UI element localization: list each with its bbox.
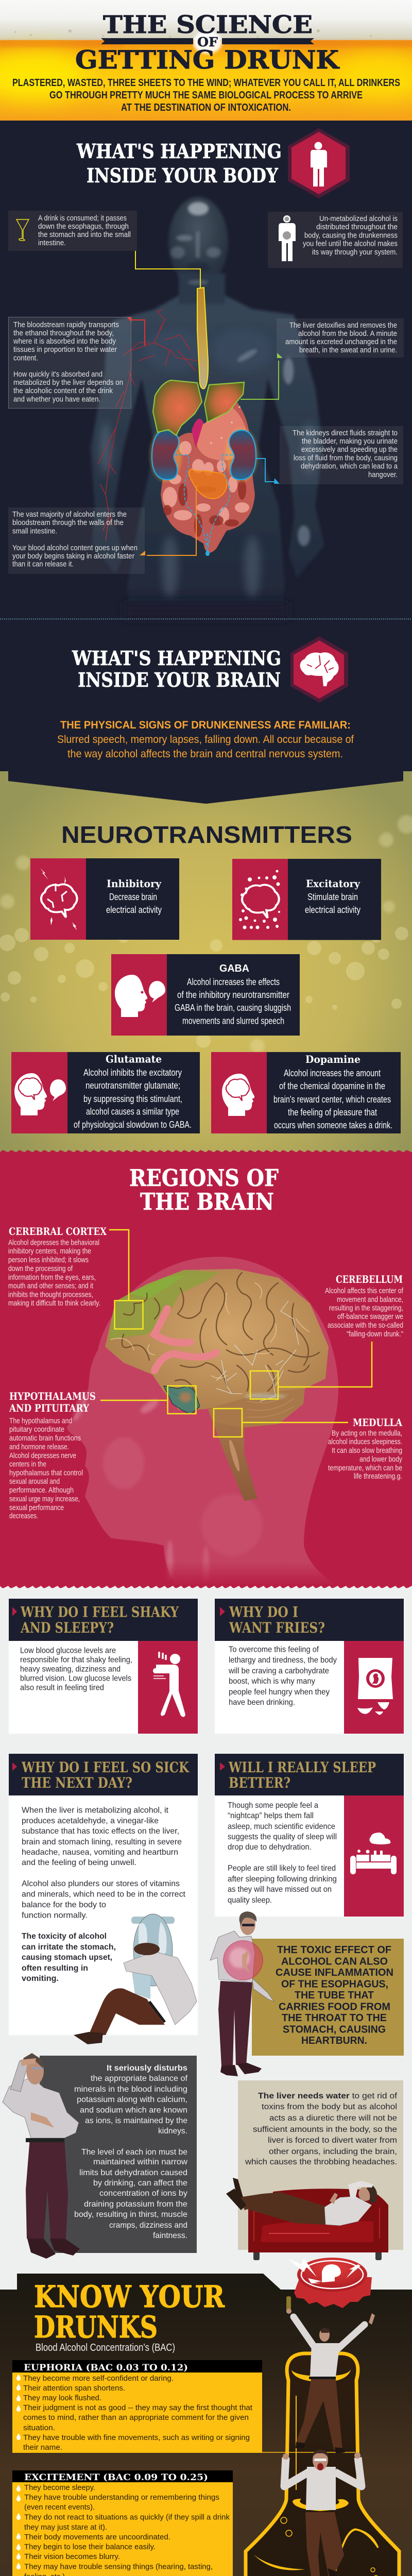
callout arrow: intestine orange [140, 486, 196, 555]
callout: small intestine: The vast majority of alcohol enters the [12, 511, 127, 519]
panel: euphoria: They have trouble with fine movements, such as writing or signing [23, 2433, 250, 2442]
panel: esophagus toxic effect: CAUSE INFLAMMATION [276, 1967, 393, 1978]
callout: cerebral cortex: CEREBRAL CORTEX [9, 1226, 107, 1238]
panel: liver needs water: other organs, including the brain, [269, 2147, 397, 2156]
callout: drink consumed [8, 211, 137, 251]
icon: body with stomach [279, 215, 296, 261]
card: glutamate: by suppressing this stimulant, [83, 1093, 182, 1104]
background: know your drunks section [0, 2274, 412, 2576]
card: want fries: To overcome this feeling of [229, 1646, 319, 1654]
panel: excitement: They become sleepy. [24, 2483, 95, 2492]
illustration: brain [105, 1269, 329, 1501]
card: sick the next day: balance for the body to [22, 1901, 106, 1909]
heading: know your drunks [34, 2279, 225, 2353]
icon: staggering figure [153, 1652, 185, 1717]
illustration: ureters and droplet [175, 455, 233, 549]
callout: hypothalamus and pituitary: The hypothalamus and [9, 1417, 72, 1425]
callout: hypothalamus and pituitary: performance. Although [9, 1486, 74, 1495]
callout: hypothalamus and pituitary: pituitary coordinate [9, 1426, 64, 1434]
illustration: man vomiting into toilet [74, 1914, 197, 2044]
card: dopamine [211, 1052, 401, 1133]
heading: inside your brain: INSIDE YOUR BRAIN [78, 668, 281, 691]
panel: liver needs water: sufficient amounts in the body, so the [253, 2125, 397, 2134]
card: shaky and sleepy: WHY DO I FEEL SHAKY [20, 1603, 179, 1621]
panel: euphoria [12, 2360, 262, 2453]
illustration: kidneys [150, 428, 258, 482]
panel: euphoria: comes to mind, rather than an appropriate comment for the given [23, 2413, 249, 2422]
card: excitatory [232, 859, 381, 940]
panel: disturbs mineral balance: kidneys. [158, 2127, 187, 2136]
illustration: man with headache [3, 2053, 80, 2259]
card: want fries: lethargy and tiredness, the body [229, 1656, 337, 1665]
card: will I really sleep better: Though some people feel a [228, 1801, 318, 1810]
card: shaky and sleepy [9, 1599, 198, 1734]
card: want fries: have been drinking. [229, 1698, 295, 1707]
illustration: esophagus [197, 287, 208, 389]
callout: un-metabolized alcohol: distributed throughout the [316, 223, 398, 231]
callout: kidneys [280, 426, 403, 484]
panel: disturbs mineral balance: faintness. [153, 2231, 187, 2240]
icon: bed with cloud [350, 1833, 397, 1874]
card: sick the next day: often resulting in [22, 1964, 88, 1973]
card: will I really sleep better: asleep, much scientific evidence [228, 1822, 335, 1831]
card: sick the next day: substance that has toxic effects on the liver, [22, 1827, 179, 1836]
callout: cerebral cortex: information from the eyes, ears, [8, 1274, 96, 1282]
card: sick the next day: produces acetaldehyde, a vinegar-like [22, 1817, 159, 1825]
background: light lower section [0, 1586, 412, 2292]
intro text [12, 77, 400, 113]
panel: disturbs mineral balance: cramps, dizziness and [109, 2221, 187, 2230]
card: will I really sleep better: “nightcap” helps them fall [228, 1811, 314, 1820]
card: dopamine: Alcohol increases the amount [284, 1067, 381, 1078]
card: sick the next day: can irritate the stomach, [22, 1943, 116, 1952]
callout: bloodstream [8, 317, 131, 408]
callout: medulla: MEDULLA [353, 1417, 403, 1429]
card: will I really sleep better: suggests the quality of sleep will [228, 1833, 337, 1841]
callout: bloodstream: and whether you have eaten. [13, 396, 100, 404]
callout: un-metabolized alcohol: its way through your system. [312, 248, 398, 257]
panel: excitement: They may have trouble sensing things (hearing, tasting, [24, 2563, 213, 2571]
background: neurotransmitters olive bokeh [0, 771, 412, 1153]
icon: head with brain [222, 1074, 254, 1116]
panel: excitement: they may just stare at it). [24, 2523, 107, 2532]
callout arrow: drink yellow [131, 245, 200, 289]
callout: hypothalamus and pituitary: sexual arousal and [9, 1478, 60, 1486]
callout: hypothalamus and pituitary: decreases. [9, 1512, 38, 1520]
panel: disturbs mineral balance [40, 2056, 197, 2253]
callout: hypothalamus and pituitary: centers in the [9, 1461, 46, 1469]
panel: euphoria: Their judgment is not as good -- they may say the first thought that [23, 2403, 253, 2412]
card: GABA: of the inhibitory neurotransmitter [177, 989, 289, 1000]
panel: liver needs water: toxins from the body but as alcohol [262, 2103, 397, 2111]
card: sick the next day [9, 1754, 198, 2035]
illustration: human body silhouette [91, 197, 324, 619]
callout: cerebral cortex: Alcohol depresses the behavioral [8, 1239, 99, 1247]
callout: cerebral cortex: person less inhibited; it slows [8, 1256, 89, 1264]
panel: disturbs mineral balance: minerals in the blood including [74, 2085, 187, 2094]
callout: kidneys: The kidneys direct fluids straight to [293, 429, 398, 437]
card: sick the next day: The toxicity of alcohol [22, 1932, 107, 1941]
panel: esophagus toxic effect: ALCOHOL CAN ALSO [281, 1956, 388, 1967]
title: OF [197, 35, 218, 49]
card: want fries [215, 1599, 404, 1734]
panel: disturbs mineral balance: draining potassium from the [84, 2200, 187, 2209]
card: inhibitory: Decrease brain [109, 891, 157, 902]
card: will I really sleep better: after sleeping following drinking [228, 1875, 337, 1884]
panel: disturbs mineral balance: It seriously disturbs [107, 2064, 187, 2073]
icon: martini glass [16, 219, 29, 241]
illustration: man with heartburn [210, 1911, 274, 2076]
panel: disturbs mineral balance: maintained within narrow [93, 2158, 187, 2166]
illustration: liver [153, 380, 244, 435]
callout: medulla [214, 1409, 403, 1481]
panel: euphoria: EUPHORIA (BAC 0.03 TO 0.12) [24, 2363, 188, 2372]
background: dark body section [0, 121, 412, 771]
callout: liver: The liver detoxifies and removes the [289, 321, 397, 330]
callout: drink consumed: the stomach and into the small [38, 231, 131, 239]
panel: liver needs water: acts as a diuretic there will not be [269, 2114, 397, 2123]
panel: excitement: EXCITEMENT (BAC 0.09 TO 0.25) [24, 2472, 208, 2482]
callout: hypothalamus and pituitary: sexual urge may increase, [9, 1495, 80, 1503]
card: shaky and sleepy: AND SLEEPY? [20, 1619, 114, 1636]
illustration: small intestine outlined [189, 469, 227, 499]
text: physical signs [57, 719, 354, 760]
card: excitatory: Stimulate brain [307, 891, 358, 902]
card: glutamate: Alcohol inhibits the excitatory [83, 1067, 182, 1078]
callout: drink consumed: A drink is consumed; it passes [38, 214, 127, 223]
illustration: translucent head profile [67, 1257, 338, 1584]
heading: know your drunks: KNOW YOUR [34, 2279, 225, 2314]
callout: small intestine: small intestine. [12, 528, 57, 536]
callout: hypothalamus and pituitary: sexual performance [9, 1504, 64, 1512]
panel: euphoria: They may look flushed. [23, 2394, 101, 2402]
panel: disturbs mineral balance: the appropriate balance of [91, 2074, 188, 2083]
heading: know your drunks: DRUNKS [34, 2310, 158, 2345]
card: GABA [111, 954, 300, 1036]
panel: esophagus toxic effect: THE TUBE THAT [295, 1990, 374, 2001]
heading: inside your body: INSIDE YOUR BODY [87, 164, 279, 187]
callout: drink consumed: down the esophagus, through [38, 223, 129, 231]
callout: bloodstream: content. [13, 354, 38, 363]
card: sick the next day: and minerals, which need to be in the correct [22, 1890, 186, 1899]
icon: brain in hexagon [290, 636, 348, 703]
brain temporal pink folds [154, 1309, 216, 1370]
panel: disturbs mineral balance: and sodium which are known [80, 2106, 187, 2114]
callout: bloodstream: The bloodstream rapidly transports [13, 321, 119, 329]
illustration: man on red couch [226, 2178, 388, 2260]
panel shape: dark chevron [8, 768, 403, 804]
card: sick the next day: and the feeling of being unwell. [22, 1858, 136, 1867]
card: want fries: people feel hungry when they [229, 1688, 330, 1697]
panel: excitement [12, 2470, 233, 2576]
callout: liver [277, 318, 404, 358]
callout: small intestine: than it can release it. [12, 561, 74, 569]
panel: disturbs mineral balance: potassium along with calcium, [77, 2095, 187, 2104]
card: excitatory: electrical activity [305, 904, 361, 915]
callout: hypothalamus and pituitary: automatic brain functions [9, 1434, 81, 1443]
icon: person in hexagon [288, 128, 350, 198]
callout: cerebral cortex: down the processing of [8, 1265, 73, 1273]
heading: neurotransmitters: NEUROTRANSMITTERS [61, 821, 352, 848]
heading: inside your brain: WHAT'S HAPPENING [72, 647, 281, 670]
card: shaky and sleepy: also result in feeling tired [20, 1684, 104, 1692]
panel: esophagus toxic effect: CARRIES FOOD FROM [279, 2001, 390, 2012]
icon: chip bag [357, 1658, 393, 1715]
card: will I really sleep better [215, 1754, 404, 1917]
callout: hypothalamus and pituitary: and hormone release. [9, 1443, 69, 1451]
heading: inside your brain [72, 647, 281, 691]
callout: small intestine [8, 507, 145, 574]
brain folds [122, 1273, 319, 1397]
callout: un-metabolized alcohol: body, causing the drunkenness [304, 232, 398, 240]
text: physical signs: THE PHYSICAL SIGNS OF DRUNKENNESS ARE FAMILIAR: [60, 719, 351, 731]
panel: euphoria: They become more self-confident or daring. [23, 2374, 174, 2383]
callout: small intestine: bloodstream through the walls of the [12, 519, 124, 527]
panel: esophagus toxic effect [252, 1939, 404, 2056]
callout: cerebral cortex [8, 1226, 143, 1329]
intro text: AT THE DESTINATION OF INTOXICATION. [121, 102, 291, 113]
callout: cerebral cortex: making it difficult to think clearly. [8, 1299, 100, 1308]
heading: regions of the brain: THE BRAIN [140, 1188, 274, 1215]
panel: esophagus toxic effect: THE TOXIC EFFECT OF [277, 1944, 391, 1956]
card: dopamine: of the chemical dopamine in the [279, 1080, 385, 1091]
callout: un-metabolized alcohol: you feel until the alcohol makes [303, 240, 398, 248]
panel: disturbs mineral balance: as ions, is maintained by the [85, 2116, 187, 2125]
card: will I really sleep better: BETTER? [229, 1774, 290, 1791]
card: GABA: GABA in the brain, causing sluggish [175, 1002, 291, 1013]
background: crimson brain regions [0, 1150, 412, 1587]
illustration: euphoric man [286, 2296, 375, 2453]
callout: small intestine: your body begins taking in alcohol faster [12, 552, 134, 561]
callout: kidneys: excessively and speeding up the [301, 446, 398, 454]
panel: liver needs water [238, 2080, 403, 2250]
panel: excitement: Their body movements are uncoordinated. [24, 2533, 170, 2541]
panel: disturbs mineral balance: The level of each ion must be [81, 2148, 187, 2157]
panel: disturbs mineral balance: concentration of ions by [99, 2189, 187, 2198]
callout: hypothalamus and pituitary: HYPOTHALAMUS [9, 1391, 96, 1402]
brain frontal lobe green area [108, 1270, 219, 1340]
card: sick the next day: headache, nausea, vomiting and heartburn [22, 1848, 178, 1857]
callout: cerebral cortex: inhibitory centers, making the [8, 1247, 91, 1256]
callout: hypothalamus and pituitary: AND PITUITARY [9, 1402, 90, 1414]
card: want fries: will be craving a carbohydrate [228, 1667, 329, 1675]
callout: bloodstream: the ethanol throughout the body, [13, 329, 114, 337]
card: want fries: WANT FRIES? [229, 1619, 325, 1636]
panel: esophagus toxic effect: THE THROAT TO THE [282, 2012, 387, 2024]
card: sick the next day: causing stomach upset, [22, 1953, 112, 1962]
callout: cerebellum [250, 1274, 404, 1399]
callout: hypothalamus and pituitary [9, 1386, 196, 1520]
card: inhibitory [30, 858, 179, 940]
panel: liver needs water: The liver needs water to get rid of [258, 2092, 398, 2100]
card: sick the next day: THE NEXT DAY? [22, 1774, 132, 1791]
illustration: excited man [283, 2450, 362, 2576]
card: dopamine: Dopamine [305, 1053, 360, 1065]
card: shaky and sleepy: blurred vision. Low glucose levels [20, 1674, 131, 1683]
card: excitatory: Excitatory [306, 877, 360, 890]
card: inhibitory: electrical activity [106, 904, 162, 915]
title: THE SCIENCE [103, 11, 313, 39]
callout: bloodstream: metabolized by the liver depends on [13, 379, 123, 387]
callout: bloodstream: the alcoholic content of the drink [13, 387, 113, 395]
callout arrow: kidney blue [256, 459, 280, 484]
card: shaky and sleepy: responsible for that shaky feeling, [20, 1656, 132, 1664]
callout: kidneys: the bladder, making you urinate [302, 437, 398, 446]
card: glutamate: Glutamate [106, 1053, 162, 1065]
callout: liver: breath, in the sweat and in urine. [299, 346, 397, 354]
illustration: blood vessels [98, 309, 198, 541]
heading: know your drunks: Blood Alcohol Concentration's (BAC) [36, 2342, 175, 2353]
callout: un-metabolized alcohol: Un-metabolized alcohol is [319, 215, 398, 223]
panel: euphoria: their name. [23, 2443, 62, 2452]
callout arrow: bloodstream red [127, 317, 145, 346]
card: will I really sleep better: quality sleep. [228, 1896, 272, 1905]
brain hypothalamus highlight [164, 1386, 200, 1414]
callout: liver: amount is excreted unchanged in the [285, 338, 397, 346]
callout: bloodstream: How quickly it's absorbed and [13, 370, 102, 379]
callout: liver: alcohol from the blood. A minute [298, 330, 397, 338]
card: GABA: GABA [219, 963, 249, 974]
panel: excitement: They do not react to situations as quickly (if they spill a drink [24, 2513, 230, 2521]
card: want fries: WHY DO I [229, 1603, 298, 1621]
card: glutamate: neurotransmitter glutamate; [85, 1080, 180, 1091]
callout: bloodstream: where it is absorbed into the body [13, 337, 116, 346]
card: glutamate [11, 1052, 200, 1133]
heading: regions of the brain: REGIONS OF [129, 1164, 279, 1192]
panel: esophagus toxic effect: STOMACH, CAUSING [283, 2024, 386, 2035]
icon: water droplet [205, 549, 210, 556]
panel: esophagus toxic effect: HEARTBURN. [301, 2035, 367, 2046]
panel: excitement: (even recent events). [24, 2503, 95, 2512]
callout: small intestine: Your blood alcohol content goes up when [12, 544, 138, 552]
icon: brain with dots [239, 870, 280, 929]
card: glutamate: alcohol causes a similar type [86, 1106, 179, 1117]
card: sick the next day: Alcohol also plunders our stores of vitamins [22, 1879, 180, 1888]
callout: kidneys: dehydration, which can lead to a [301, 463, 398, 471]
card: sick the next day: When the liver is metabolizing alcohol, it [22, 1806, 169, 1815]
card: glutamate: of physiological slowdown to GABA. [74, 1119, 192, 1130]
panel: liver needs water: which causes the throbbing headaches. [245, 2158, 397, 2166]
title [75, 11, 340, 75]
panel: euphoria: situation. [23, 2424, 55, 2432]
callout: kidneys: hangover. [368, 471, 398, 479]
callout: un-metabolized alcohol [268, 212, 403, 268]
card: sick the next day: brain and stomach lining, resulting in severe [22, 1838, 182, 1846]
illustration: bottle cap with head icon [288, 2258, 372, 2308]
brain lightning [216, 1301, 299, 1401]
illustration: intestines and stomach [161, 392, 255, 553]
callout: cerebral cortex: inhibits the thought processes, [8, 1291, 93, 1299]
card: sick the next day: function normally. [22, 1911, 88, 1920]
card: will I really sleep better: drop due to dehydration. [228, 1843, 312, 1852]
callout: drink consumed: intestine. [38, 239, 66, 247]
panel: excitement: Their vision becomes blurry. [24, 2552, 120, 2561]
callout: bloodstream: tissues in proportion to their water [13, 346, 117, 354]
callout arrow: liver green [241, 353, 283, 399]
card: shaky and sleepy: Low blood glucose levels are [20, 1647, 116, 1655]
text: physical signs: the way alcohol affects the brain and central nervous system. [67, 748, 343, 760]
text: physical signs: Slurred speech, memory lapses, falling down. All occur because of [57, 734, 354, 745]
background: header beer and foam [0, 0, 412, 121]
card: shaky and sleepy: heavy sweating, dizziness and [20, 1665, 121, 1673]
callout: hypothalamus and pituitary: hypothalamus that control [9, 1469, 83, 1477]
icon: head with speech bubble [115, 975, 165, 1017]
panel: euphoria: Their attention span shortens. [23, 2384, 125, 2393]
panel: disturbs mineral balance: by drinking, can affect the [93, 2179, 187, 2188]
brain cerebellum ridges [247, 1394, 294, 1417]
callout: cerebral cortex: mouth and other senses; and it [8, 1282, 93, 1291]
card: GABA: Alcohol increases the effects [187, 976, 280, 987]
card: sick the next day: WHY DO I FEEL SO SICK [21, 1759, 190, 1776]
callout: medulla: and lower body [359, 1455, 403, 1464]
card: inhibitory: Inhibitory [107, 877, 162, 890]
icon: brain with lightning [40, 868, 77, 930]
panel: disturbs mineral balance: limits but dehydration caused [79, 2168, 187, 2177]
card: dopamine: the feeling of pleasure that [288, 1107, 377, 1117]
title: GETTING DRUNK [75, 45, 340, 75]
illustration: bottle outline [233, 2353, 399, 2576]
callout: kidneys: loss of fluid from the body, causing [294, 454, 398, 463]
card: will I really sleep better: as they will have missed out on [228, 1885, 332, 1894]
icon: head with brain and bubble [14, 1073, 66, 1115]
card: will I really sleep better: WILL I REALLY SLEEP [228, 1759, 376, 1776]
card: GABA: movements and slurred speech [182, 1015, 284, 1026]
card: will I really sleep better: People are still likely to feel tired [228, 1864, 336, 1873]
panel: esophagus toxic effect: OF THE ESOPHAGUS, [281, 1978, 388, 1990]
illustration: face highlights [71, 1391, 263, 1587]
card: want fries: boost, which is why many [229, 1677, 315, 1686]
heading: inside your body: WHAT'S HAPPENING [76, 140, 282, 163]
panel: excitement: They begin to lose their balance easily. [24, 2543, 156, 2551]
card: sick the next day: vomiting. [22, 1974, 59, 1983]
panel: disturbs mineral balance: body, resulting in thirst, muscle [74, 2210, 187, 2219]
callout: medulla: life threatening.g. [354, 1472, 402, 1481]
heading: regions of the brain [129, 1164, 279, 1215]
heading: inside your body [76, 140, 282, 187]
callout: hypothalamus and pituitary: Alcohol depresses nerve [9, 1452, 76, 1460]
panel: liver needs water: liver is forced to divert water from [268, 2136, 397, 2145]
panel: excitement: They have trouble understanding or remembering things [24, 2493, 219, 2502]
